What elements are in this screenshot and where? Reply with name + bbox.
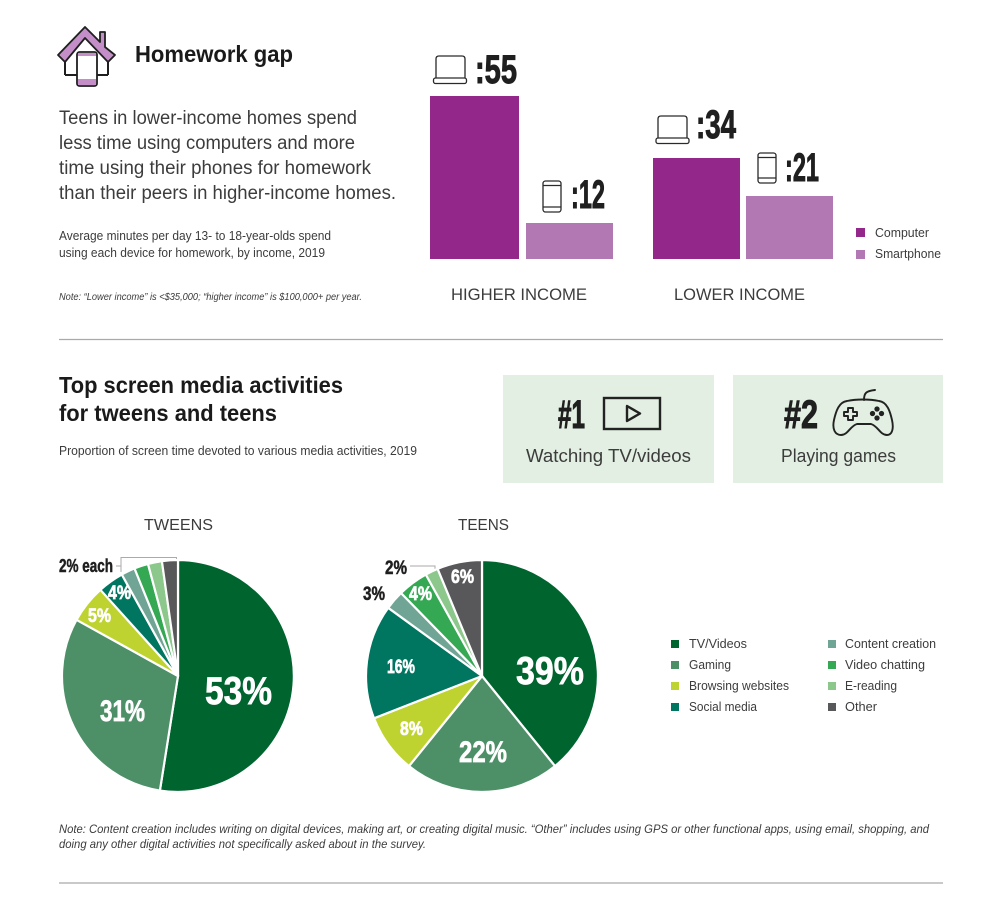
value: 22%: 22% xyxy=(459,736,507,769)
bar: lower income smartphone xyxy=(746,196,833,259)
slice: video chatting 4% xyxy=(401,574,482,676)
value: 31%: 31% xyxy=(100,695,145,728)
value: 3%: 3% xyxy=(363,584,385,605)
label: playing games: Playing games xyxy=(781,445,896,466)
legend: media activities xyxy=(671,637,936,714)
icon: laptop higher income xyxy=(434,56,466,84)
rank: #2: #2 xyxy=(784,393,818,437)
bar: higher income computer xyxy=(430,96,519,259)
bar chart: minutes per day by device and income xyxy=(430,48,833,304)
value: lower income computer: :34 xyxy=(696,103,737,147)
slice: TV/videos 53% xyxy=(160,560,294,792)
text block: chart description xyxy=(59,229,331,260)
heading: top screen media activities xyxy=(59,372,343,426)
bar: higher income smartphone xyxy=(526,223,613,259)
label: watching TV/videos: Watching TV/videos xyxy=(526,445,691,466)
value: 4%: 4% xyxy=(108,583,131,604)
icon: laptop lower income xyxy=(656,116,689,144)
pie chart: tweens xyxy=(59,517,294,792)
legend: media activities: Content creation xyxy=(845,637,936,651)
chart title: tweens: TWEENS xyxy=(144,517,213,534)
chart title: teens: TEENS xyxy=(458,517,509,534)
legend: media activities: Gaming xyxy=(689,658,731,672)
text block: homework summary: than their peers in higher-income homes. xyxy=(59,183,396,204)
slice: TV/videos 39% xyxy=(482,560,598,766)
text block: pie chart description: Proportion of screen time devoted to various media activities, 2019 xyxy=(59,444,417,458)
slice: content creation 2% xyxy=(122,568,178,676)
legend: media activities: Other xyxy=(845,700,877,714)
value: 16%: 16% xyxy=(387,657,415,678)
text block: homework summary xyxy=(59,108,396,204)
value: higher income computer: :55 xyxy=(475,48,517,92)
text block: homework summary: Teens in lower-income homes spend xyxy=(59,108,357,129)
value: lower income smartphone: :21 xyxy=(785,146,819,190)
slice: browsing websites 5% xyxy=(76,590,178,676)
rank: #1: #1 xyxy=(558,393,585,437)
slice: social media 16% xyxy=(366,608,482,718)
leader line: 2% xyxy=(410,566,435,571)
note: content creation and other definitions: Note: Content creation includes writing on digital devices, making art, or creating digital music. “Other” includes using GPS or other functional apps, using email, shopping, and xyxy=(59,822,929,836)
legend: media activities: Video chatting xyxy=(845,658,925,672)
legend: device: Smartphone xyxy=(875,247,941,261)
leader line: 2% each xyxy=(116,558,176,572)
value: higher income smartphone: :12 xyxy=(571,173,605,217)
value: 5%: 5% xyxy=(88,606,111,627)
legend: media activities: Browsing websites xyxy=(689,679,789,693)
text block: chart description: Average minutes per day 13- to 18-year-olds spend xyxy=(59,229,331,243)
slice: gaming 31% xyxy=(62,620,178,791)
text block: homework summary: time using their phones for homework xyxy=(59,158,371,179)
panel: number one activity xyxy=(503,375,714,483)
legend: media activities: TV/Videos xyxy=(689,637,747,651)
value: 2%: 2% xyxy=(385,558,407,579)
heading: top screen media activities: Top screen media activities xyxy=(59,372,343,398)
legend: media activities: Social media xyxy=(689,700,757,714)
value: 53%: 53% xyxy=(205,670,272,713)
heading: top screen media activities: for tweens and teens xyxy=(59,400,277,426)
legend: media activities: E-reading xyxy=(845,679,897,693)
text block: homework summary: less time using computers and more xyxy=(59,133,355,154)
icon: video player xyxy=(604,398,660,429)
note: content creation and other definitions: doing any other digital activities not specifically asked about in the survey. xyxy=(59,837,426,851)
value: 8%: 8% xyxy=(400,719,423,740)
slice: e-reading 2% xyxy=(426,569,482,676)
legend: device: Computer xyxy=(875,226,929,240)
panel: number two activity xyxy=(733,375,943,483)
text block: chart description: using each device for homework, by income, 2019 xyxy=(59,246,325,260)
slice: e-reading 2% xyxy=(148,561,178,676)
value: 2% each: 2% each xyxy=(59,556,113,576)
icon: smartphone higher income xyxy=(543,181,561,212)
slice: other 6% xyxy=(438,560,482,676)
note: content creation and other definitions xyxy=(59,822,929,851)
pie chart: teens xyxy=(363,517,598,792)
icon: smartphone lower income xyxy=(758,153,776,183)
value: 39%: 39% xyxy=(516,650,584,693)
slice: other 2% xyxy=(162,560,178,676)
icon: house with smartphone xyxy=(58,27,115,86)
slice: video chatting 2% xyxy=(134,564,178,676)
legend: device xyxy=(856,226,941,261)
value: 6%: 6% xyxy=(451,567,474,588)
note: income definition: Note: “Lower income” is <$35,000; “higher income” is $100,000+ per year. xyxy=(59,292,362,303)
slice: social media 4% xyxy=(100,574,178,676)
slice: browsing websites 8% xyxy=(374,676,482,766)
bar: lower income computer xyxy=(653,158,740,259)
axis label: lower income: LOWER INCOME xyxy=(674,285,805,304)
slice: content creation 3% xyxy=(388,593,482,676)
slice: gaming 22% xyxy=(409,676,555,792)
axis label: higher income: HIGHER INCOME xyxy=(451,285,587,304)
icon: game controller xyxy=(833,390,893,435)
value: 4%: 4% xyxy=(409,584,432,605)
heading: Homework gap: Homework gap xyxy=(135,41,293,67)
